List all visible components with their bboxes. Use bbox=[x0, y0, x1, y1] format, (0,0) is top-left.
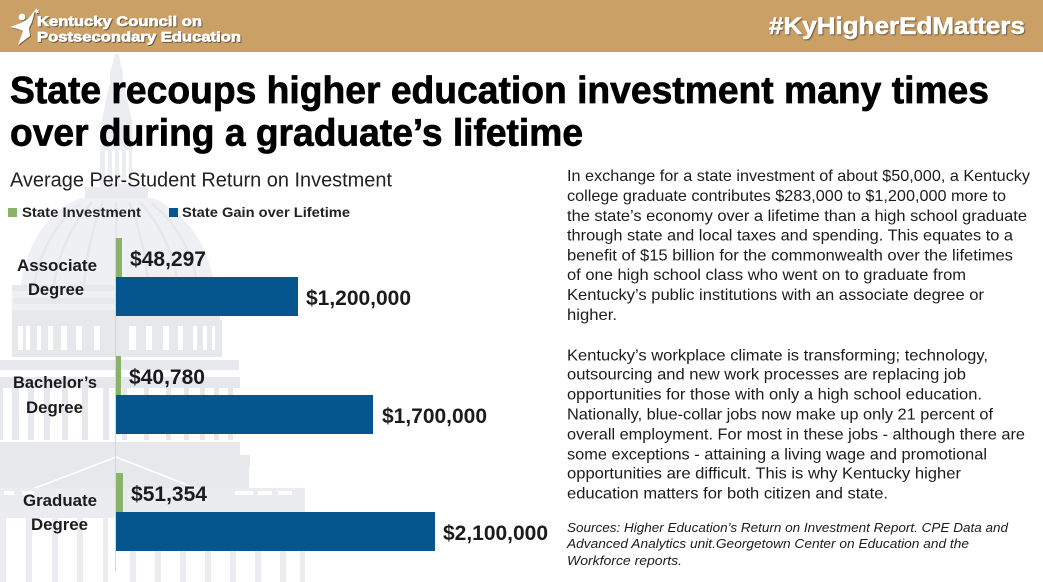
sources note: Advanced Analytics unit.Georgetown Center on Education and the bbox=[566, 536, 969, 551]
group: graduate degree: Graduate bbox=[23, 491, 97, 510]
group: graduate degree: $2,100,000 bbox=[443, 522, 548, 545]
group: bachelor's degree: Degree bbox=[26, 398, 83, 417]
group: associate degree bbox=[17, 238, 411, 316]
text block: workplace paragraph: Kentucky’s workplace climate is transforming; technology, bbox=[567, 348, 988, 364]
chart subtitle: Average Per-Student Return on Investment bbox=[10, 170, 392, 192]
group: associate degree: $48,297 bbox=[130, 248, 206, 271]
bar chart bbox=[13, 238, 548, 571]
group: bachelor's degree bbox=[13, 356, 487, 434]
icon: star figure logo bbox=[10, 8, 39, 45]
group: graduate degree: $51,354 bbox=[131, 483, 207, 506]
text block: workplace paragraph bbox=[567, 348, 1025, 502]
title: State recoups higher education investment many times bbox=[10, 70, 989, 112]
legend bbox=[8, 204, 350, 220]
organization name bbox=[37, 13, 241, 44]
text block: workplace paragraph: Nationally, blue-collar jobs now make up only 21 percent of bbox=[567, 406, 994, 424]
group: bachelor's degree: $1,700,000 bbox=[382, 405, 487, 428]
hashtag: #KyHigherEdMatters bbox=[769, 13, 1025, 40]
text block: investment paragraph: higher. bbox=[567, 307, 617, 324]
group: associate degree: $1,200,000 bbox=[306, 287, 411, 310]
sources note: Workforce reports. bbox=[567, 553, 682, 568]
group: associate degree: Degree bbox=[28, 280, 84, 299]
title bbox=[10, 70, 989, 154]
text block: investment paragraph bbox=[567, 168, 1030, 324]
text block: investment paragraph: the state’s economy over a lifetime than a high school graduate bbox=[567, 208, 1027, 225]
group: bachelor's degree: Bachelor’s bbox=[13, 373, 97, 392]
text block: investment paragraph: Kentucky’s public institutions with an associate degree or bbox=[567, 287, 984, 304]
background: capitol building watermark bbox=[0, 54, 305, 582]
sources note bbox=[566, 520, 1009, 568]
text block: workplace paragraph: some exceptions - attaining a living wage and promotional bbox=[567, 446, 987, 464]
text block: workplace paragraph: opportunities for those with only a high school education. bbox=[567, 386, 982, 404]
legend: State Investment bbox=[22, 204, 141, 220]
text block: investment paragraph: college graduate contributes $283,000 to $1,200,000 more to bbox=[567, 188, 1006, 205]
text block: workplace paragraph: overall employment. For most in these jobs - although there are bbox=[567, 426, 1025, 444]
text block: investment paragraph: of one high school class who went on to graduate from bbox=[567, 267, 966, 284]
group: graduate degree: Degree bbox=[31, 515, 88, 534]
group: graduate degree bbox=[23, 473, 548, 551]
organization name: Kentucky Council on bbox=[37, 13, 202, 29]
legend: State Gain over Lifetime bbox=[182, 204, 350, 220]
text block: investment paragraph: In exchange for a state investment of about $50,000, a Kentucky bbox=[567, 168, 1030, 185]
text block: investment paragraph: through state and local taxes and spending. This equates to a bbox=[567, 228, 1013, 244]
text block: workplace paragraph: education matters for both citizen and state. bbox=[567, 486, 888, 502]
text block: workplace paragraph: outsourcing and new work processes are replacing job bbox=[567, 366, 966, 384]
header band bbox=[0, 0, 1043, 52]
sources note: Sources: Higher Education’s Return on Investment Report. CPE Data and bbox=[567, 520, 1009, 535]
group: bachelor's degree: $40,780 bbox=[129, 366, 205, 389]
text block: workplace paragraph: opportunities are difficult. This is why Kentucky higher bbox=[567, 466, 961, 482]
title: over during a graduate’s lifetime bbox=[10, 112, 583, 154]
organization name: Postsecondary Education bbox=[37, 28, 241, 44]
text block: investment paragraph: benefit of $15 billion for the commonwealth over the lifetimes bbox=[567, 248, 1013, 264]
group: associate degree: Associate bbox=[17, 256, 97, 275]
